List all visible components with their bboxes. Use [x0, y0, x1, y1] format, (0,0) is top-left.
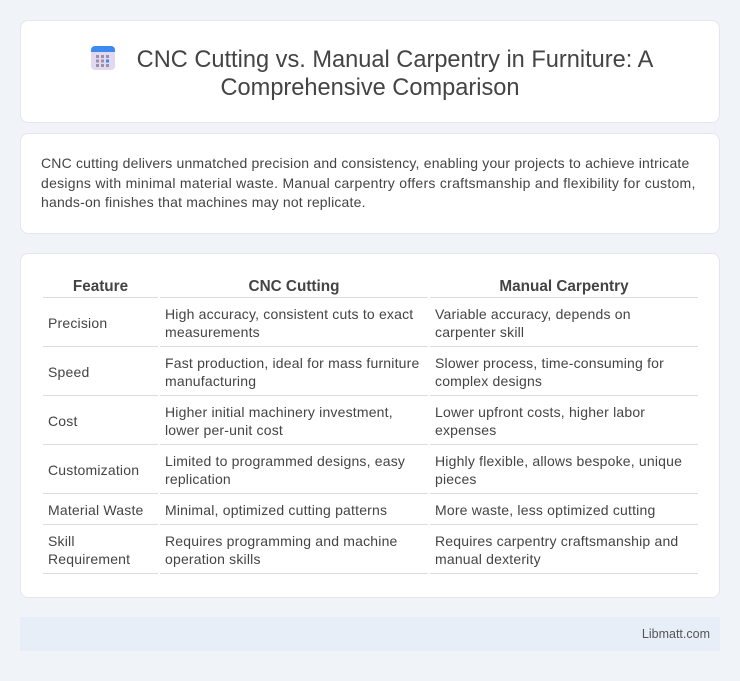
- comparison table: lower per-unit cost: [165, 422, 283, 438]
- comparison table: Precision: [48, 315, 107, 331]
- comparison table: manual dexterity: [435, 551, 541, 567]
- comparison table: High accuracy, consistent cuts to exact: [165, 306, 413, 322]
- comparison table: Skill: [48, 533, 75, 549]
- comparison table: manufacturing: [165, 373, 256, 389]
- comparison table: Lower upfront costs, higher labor: [435, 404, 645, 420]
- comparison table: replication: [165, 471, 231, 487]
- comparison table: Feature: [73, 278, 128, 295]
- icon: calendar: [91, 46, 115, 70]
- footer text: Libmatt.com: [642, 627, 710, 641]
- intro text: designs with minimal material waste. Manual carpentry offers craftsmanship and flexibility for custom,: [41, 175, 696, 191]
- comparison table: Cost: [48, 413, 78, 429]
- comparison table: CNC Cutting: [249, 278, 339, 295]
- comparison table: Higher initial machinery investment,: [165, 404, 393, 420]
- comparison table: Customization: [48, 462, 139, 478]
- comparison table: pieces: [435, 471, 477, 487]
- comparison table: Slower process, time-consuming for: [435, 355, 664, 371]
- title: Comprehensive Comparison: [220, 75, 520, 101]
- footer bar: [20, 617, 720, 651]
- title: [137, 47, 654, 101]
- comparison table: Fast production, ideal for mass furniture: [165, 355, 419, 371]
- header card: [20, 20, 720, 123]
- comparison table: Manual Carpentry: [499, 278, 629, 295]
- comparison table: operation skills: [165, 551, 261, 567]
- comparison table: complex designs: [435, 373, 542, 389]
- comparison table: More waste, less optimized cutting: [435, 502, 655, 518]
- title: CNC Cutting vs. Manual Carpentry in Furniture: A: [137, 47, 653, 73]
- intro text: [41, 155, 696, 210]
- comparison table: Limited to programmed designs, easy: [165, 453, 405, 469]
- comparison table: Requires programming and machine: [165, 533, 398, 549]
- comparison table: Requirement: [48, 551, 130, 567]
- comparison table: Highly flexible, allows bespoke, unique: [435, 453, 682, 469]
- comparison table: Speed: [48, 364, 89, 380]
- intro card: [20, 133, 720, 234]
- comparison table: Minimal, optimized cutting patterns: [165, 502, 387, 518]
- intro text: CNC cutting delivers unmatched precision and consistency, enabling your projects to achieve intricate: [41, 155, 689, 171]
- comparison table: Variable accuracy, depends on: [435, 306, 631, 322]
- comparison table: Material Waste: [48, 502, 144, 518]
- comparison table: expenses: [435, 422, 496, 438]
- table card: [20, 253, 720, 598]
- comparison table: Requires carpentry craftsmanship and: [435, 533, 678, 549]
- comparison table: measurements: [165, 324, 260, 340]
- comparison table: carpenter skill: [435, 324, 524, 340]
- comparison table: [43, 278, 698, 574]
- intro text: hands-on finishes that machines may not replicate.: [41, 194, 366, 210]
